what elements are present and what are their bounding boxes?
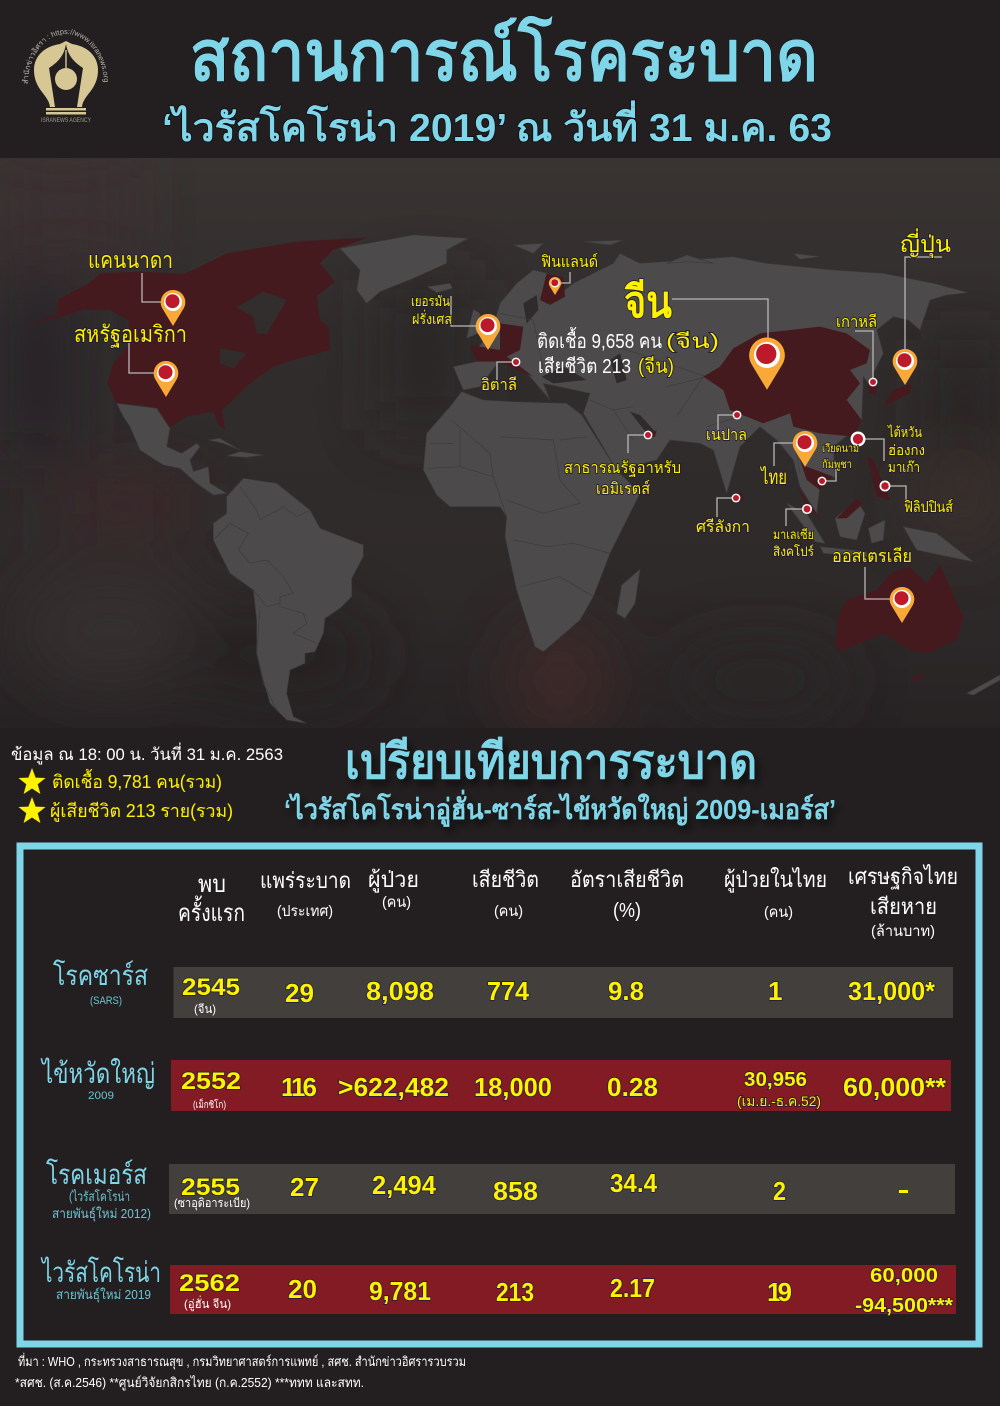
Mexico and Central America — [117, 403, 227, 495]
South America — [213, 478, 363, 723]
Indonesia and islands — [787, 500, 973, 562]
values: 60,000** — [843, 1072, 947, 1102]
table header — [178, 864, 958, 940]
Eurasia — [453, 253, 968, 513]
column: patients: (คน) — [382, 894, 411, 911]
data timestamp: ข้อมูล ณ 18: 00 น. วันที่ 31 ม.ค. 2563 — [11, 742, 283, 765]
dot: UAE — [644, 431, 652, 439]
label: Cambodia: กัมพูชา — [822, 459, 852, 471]
values: 1 — [768, 976, 782, 1006]
logo nib circle — [55, 68, 77, 90]
dot: Nepal — [733, 411, 741, 419]
dot: Philippines — [880, 480, 890, 492]
label: Thailand: ไทย — [760, 466, 787, 489]
pin: Germany France — [476, 314, 500, 350]
China deaths count: (จีน) — [638, 356, 674, 378]
first found: 2562 — [179, 1270, 240, 1297]
column: countries: (ประเทศ) — [277, 903, 333, 920]
Greenland — [340, 235, 468, 303]
label: Macau: มาเก๊า — [888, 459, 920, 475]
South America borders — [213, 487, 317, 710]
row name: สายพันธุ์ใหม่ 2012) — [52, 1206, 151, 1222]
column: first found — [178, 871, 245, 927]
subtitle: ‘ไวรัสโคโรน่า 2019’ ณ วันที่ 31 ม.ค. 63 — [162, 100, 832, 150]
panel: header band — [0, 0, 1000, 158]
column: economic damage: เศรษฐกิจไทย — [848, 864, 958, 890]
label: UAE line 1: สาธารณรัฐอาหรับ — [564, 460, 681, 477]
Persian Gulf — [630, 412, 657, 433]
values: 18,000 — [474, 1072, 552, 1102]
label: Korea: เกาหลี — [836, 313, 877, 331]
values: 29 — [285, 978, 314, 1008]
panel: blurred photo background — [0, 150, 1000, 740]
column: deaths: (คน) — [494, 903, 523, 920]
row: MERS — [46, 1158, 955, 1222]
map: east hemisphere landmasses — [453, 240, 1000, 695]
icon: star deaths — [18, 797, 46, 823]
logo nib slit — [65, 50, 67, 70]
logo arc path — [28, 34, 104, 84]
row name — [40, 1057, 155, 1102]
values — [281, 1069, 947, 1109]
values: 774 — [487, 976, 530, 1006]
logo arc text: สำนักข่าวอิศรา : https://www.isranews.org — [22, 29, 108, 84]
pin: China — [749, 338, 785, 390]
column: economic damage — [848, 864, 958, 940]
column: first found: ครั้งแรก — [178, 895, 245, 927]
title: สถานการณ์โรคระบาด — [190, 15, 818, 95]
column: patients — [368, 867, 419, 911]
China infected count — [537, 327, 719, 353]
column: economic damage: เสียหาย — [870, 894, 937, 919]
logo bulb — [34, 41, 98, 107]
row name: (ไวรัสโคโรน่า — [69, 1189, 130, 1204]
column: patients in Thailand: ผู้ป่วยในไทย — [724, 867, 827, 893]
pin: Finland — [549, 277, 561, 295]
row name: โรคซาร์ส — [53, 959, 148, 991]
dot: Korea — [869, 378, 877, 386]
China infected count: (จีน) — [666, 331, 719, 353]
label: Philippines: ฟิลิปปินส์ — [904, 499, 953, 516]
label: Canada: แคนนาดา — [88, 247, 173, 273]
values: >622,482 — [338, 1072, 449, 1102]
panel: comparison table frame — [20, 846, 979, 1344]
pin: Canada — [161, 290, 185, 326]
comparison heading: เปรียบเทียบการระบาด — [345, 736, 757, 789]
first found: 2545 — [182, 974, 240, 1001]
dot: Sri Lanka — [732, 494, 740, 502]
values: 30,956 — [744, 1069, 807, 1091]
values: 27 — [290, 1172, 319, 1202]
values: 9.8 — [608, 976, 644, 1006]
logo nib cutout — [49, 44, 83, 107]
label: France: ฝรั่งเศส — [412, 310, 452, 327]
values — [285, 976, 936, 1008]
values: 213 — [496, 1277, 534, 1307]
dot: Cambodia Vietnam — [818, 477, 826, 485]
values — [290, 1168, 908, 1206]
map country labels — [74, 228, 953, 566]
values: 2,494 — [372, 1170, 437, 1200]
row name: สายพันธุ์ใหม่ 2019 — [56, 1287, 151, 1303]
label: Nepal: เนปาล — [706, 427, 747, 444]
row name: ไวรัสโคโรน่า — [41, 1256, 161, 1288]
Arctic islands — [513, 240, 820, 263]
China infected count: ติดเชื้อ 9,658 คน — [537, 327, 662, 353]
row name: 2009 — [88, 1090, 114, 1102]
label: Malaysia: มาเลเซีย — [773, 527, 814, 542]
icon: Isranews logo — [22, 29, 108, 124]
Australia (red) — [835, 565, 963, 684]
icon: star infected — [18, 768, 46, 794]
first found: (จีน) — [194, 1002, 216, 1016]
column: fatality rate: (%) — [613, 900, 641, 922]
logo base bars — [46, 108, 86, 114]
first found: (อู่ฮั่น จีน) — [184, 1295, 231, 1312]
source note: ที่มา : WHO , กระทรวงสาธารณสุข , กรมวิทยาศาสตร์การแพทย์ , สศช. สำนักข่าวอิศรารวบรวม — [18, 1353, 466, 1370]
Canada and USA (red) — [22, 237, 368, 430]
China deaths count: เสียชีวิต 213 — [538, 356, 631, 378]
first found: 2552 — [181, 1068, 241, 1095]
UK — [467, 309, 480, 338]
values: 9,781 — [369, 1276, 431, 1306]
row name: โรคเมอร์ส — [46, 1158, 147, 1190]
Iceland — [427, 283, 453, 293]
row band — [171, 1060, 951, 1111]
map: west hemisphere landmasses — [22, 235, 640, 723]
pin: Japan — [893, 349, 917, 385]
values: 116 — [281, 1072, 317, 1102]
values: 858 — [493, 1176, 538, 1206]
row band — [174, 967, 953, 1018]
column: fatality rate: อัตราเสียชีวิต — [570, 867, 684, 892]
column: countries: แพร่ระบาด — [260, 868, 351, 893]
values: 2.17 — [610, 1273, 655, 1303]
column: fatality rate — [570, 867, 684, 922]
label: Japan: ญี่ปุ่น — [900, 228, 951, 258]
column: patients: ผู้ป่วย — [368, 867, 419, 893]
Africa — [423, 392, 640, 652]
label: Germany: เยอรมัน — [411, 293, 450, 309]
label: Singapore: สิงคโปร์ — [773, 544, 814, 559]
column: patients in Thailand: (คน) — [764, 904, 793, 921]
label: China: จีน — [624, 278, 672, 327]
column: deaths — [472, 867, 539, 920]
label: Hong Kong: ฮ่องกง — [888, 442, 925, 458]
values — [288, 1265, 953, 1317]
row name: ไข้หวัดใหญ่ — [40, 1057, 155, 1089]
logo caption: ISRANEWS AGENCY — [41, 118, 91, 124]
comparison subheading: ‘ไวรัสโคโรน่าอู่ฮั่น-ซาร์ส-ไข้หวัดใหญ่ 2009-เมอร์ส’ — [284, 789, 836, 827]
pin: Australia — [890, 587, 914, 623]
label: Vietnam: เวียดนาม — [822, 442, 859, 455]
values: 0.28 — [607, 1072, 658, 1102]
first found: (เม็กซิโก) — [193, 1097, 226, 1111]
label: Sri Lanka: ศรีลังกา — [696, 518, 750, 536]
dot: Taiwan Hong Kong Macau — [851, 432, 865, 446]
label: UAE line 2: เอมิเรตส์ — [596, 479, 650, 498]
first found — [179, 1270, 240, 1312]
values: 8,098 — [366, 976, 434, 1006]
total deaths: ผู้เสียชีวิต 213 ราย(รวม) — [50, 801, 233, 822]
row: SARS — [53, 959, 953, 1018]
first found — [182, 974, 240, 1016]
Finland (red) — [540, 273, 565, 305]
New Zealand — [967, 675, 1000, 695]
values: 20 — [288, 1274, 317, 1304]
first found — [181, 1068, 241, 1111]
values: 34.4 — [610, 1168, 657, 1198]
first found: (ซาอุดิอาระเบีย) — [174, 1196, 250, 1211]
row name — [41, 1256, 161, 1303]
row name — [46, 1158, 151, 1222]
column: first found: พบ — [198, 871, 226, 898]
label: Taiwan: ไต้หวัน — [887, 424, 922, 440]
China (red) — [703, 327, 870, 437]
row: novel coronavirus 2019 — [41, 1256, 956, 1317]
dot: Italy — [512, 358, 520, 366]
France, Germany, Italy (red) — [470, 323, 533, 377]
total infected: ติดเชื้อ 9,781 คน(รวม) — [52, 769, 222, 792]
pin: USA — [154, 361, 178, 397]
values: (เม.ย.-ธ.ค.52) — [737, 1093, 821, 1109]
label: USA: สหรัฐอเมริกา — [74, 321, 187, 348]
row band — [169, 1164, 955, 1214]
map connector lines — [129, 257, 942, 599]
values: 2 — [773, 1176, 786, 1206]
Asian affected countries (red) — [647, 383, 912, 518]
map pins — [154, 277, 917, 623]
Africa borders — [427, 420, 610, 597]
label: Italy: อิตาลี — [481, 376, 517, 394]
values: 60,000 — [870, 1265, 938, 1287]
first found — [174, 1174, 250, 1211]
Madagascar — [617, 569, 640, 618]
label: Finland: ฟินแลนด์ — [541, 252, 598, 271]
column: countries — [260, 868, 351, 920]
Black and Caspian seas — [523, 295, 627, 383]
column: deaths: เสียชีวิต — [472, 867, 539, 892]
first found: 2555 — [181, 1174, 240, 1201]
column: patients in Thailand — [724, 867, 827, 921]
label: Australia: ออสเตรเลีย — [832, 546, 912, 566]
row name — [53, 959, 148, 1007]
world map — [22, 235, 1000, 723]
values: -94,500*** — [855, 1295, 953, 1317]
column: economic damage: (ล้านบาท) — [871, 923, 935, 940]
values: 19 — [767, 1277, 792, 1307]
dot: Malaysia Singapore — [802, 504, 812, 514]
row name: (SARS) — [90, 995, 122, 1007]
row: H1N1 2009 — [40, 1057, 951, 1111]
Caribbean — [208, 438, 263, 457]
Asia borders — [500, 313, 800, 473]
footnote: *สศช. (ส.ค.2546) **ศูนย์วิจัยกสิกรไทย (ก.ค.2552) ***ททท และสทท. — [15, 1375, 364, 1391]
row band — [170, 1265, 956, 1314]
pin: Thailand — [793, 431, 817, 467]
values: 31,000* — [848, 976, 936, 1006]
